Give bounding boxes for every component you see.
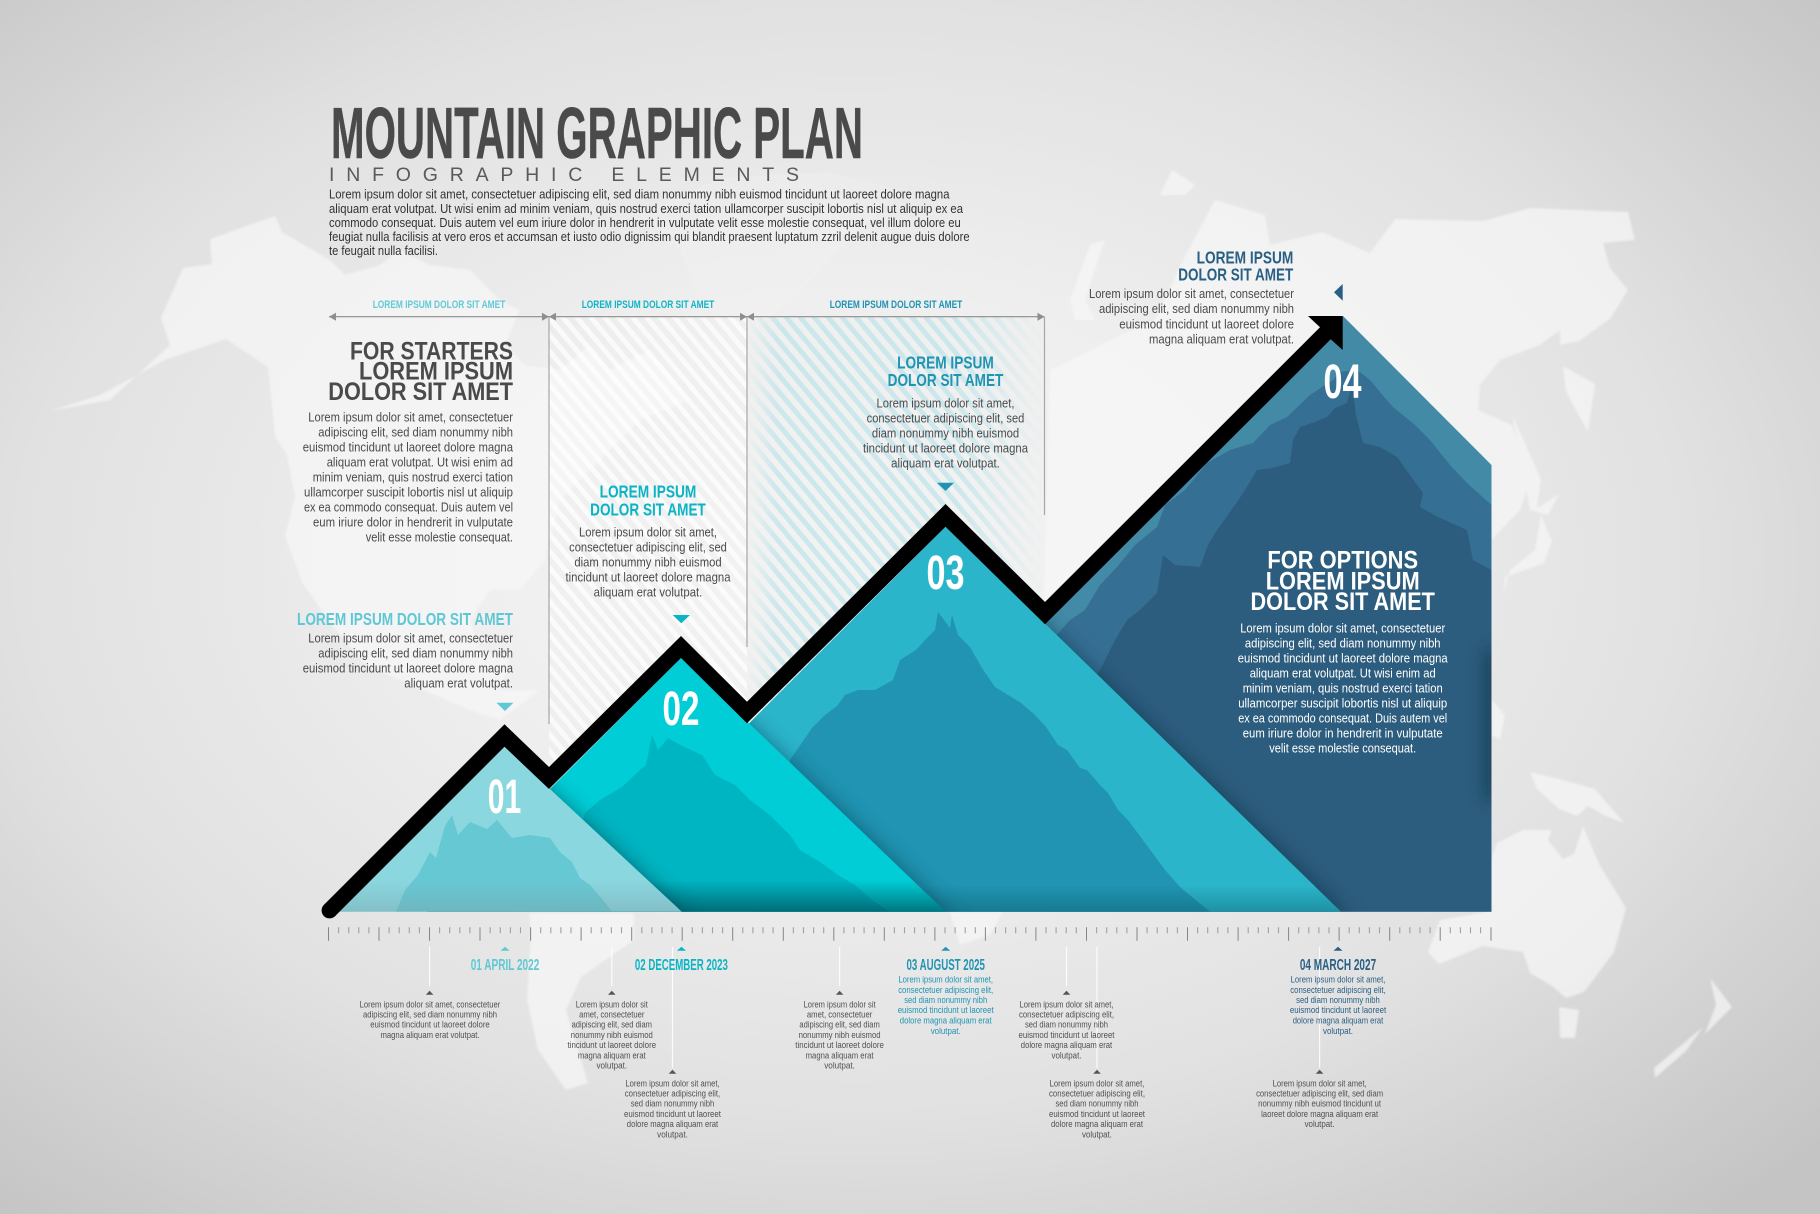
timeline note B: Lorem ipsum dolor sit: [576, 1000, 648, 1010]
subtitle: INFOGRAPHIC ELEMENTS: [329, 164, 799, 186]
timeline note D: nonummy nibh euismod: [799, 1030, 881, 1040]
timeline note C: euismod tincidunt ut laoreet: [624, 1109, 721, 1119]
timeline note D: Lorem ipsum dolor sit: [804, 1000, 876, 1010]
timeline note B: volutpat.: [596, 1060, 627, 1070]
body: for options: Lorem ipsum dolor sit amet, consectetuer: [1240, 622, 1446, 636]
callout 03: diam nonummy nibh euismod: [872, 426, 1019, 440]
body: for starters: ullamcorper suscipit lobortis nisl ut aliquip: [304, 486, 513, 500]
date 04: volutpat.: [1323, 1026, 1353, 1036]
date 03: 03 AUGUST 2025: [906, 957, 985, 974]
world map: [50, 170, 1732, 1090]
body: for options: adipiscing elit, sed diam nonummy nibh: [1245, 637, 1441, 651]
heading: for options: FOR OPTIONS: [1267, 547, 1418, 574]
callout 04: DOLOR SIT AMET: [1178, 264, 1294, 284]
timeline note F: dolore magna aliquam erat: [1051, 1119, 1143, 1129]
timeline note C: [624, 1070, 721, 1139]
callout 03: DOLOR SIT AMET: [888, 370, 1004, 390]
callout 01: LOREM IPSUM DOLOR SIT AMET: [297, 609, 513, 629]
number 03: 03: [926, 547, 964, 600]
date 01: [471, 947, 539, 974]
timeline note F: consectetuer adipiscing elit,: [1049, 1088, 1145, 1098]
heading: for options: LOREM IPSUM: [1266, 568, 1420, 595]
striped panel 2: [549, 317, 747, 787]
date 04: sed diam nonummy nibh: [1296, 995, 1380, 1005]
intro paragraph: feugiat nulla facilisis at vero eros et accumsan et iusto odio dignissim qui blandit praesent luptatum zzril delenit augue duis dolore: [329, 230, 970, 244]
timeline note E: [1018, 991, 1115, 1060]
callout 03: LOREM IPSUM: [897, 352, 994, 372]
callout 03: Lorem ipsum dolor sit amet,: [876, 396, 1014, 410]
timeline note C: consectetuer adipiscing elit,: [625, 1088, 720, 1098]
timeline note A: adipiscing elit, sed diam nonummy nibh: [363, 1010, 497, 1020]
span label 1: LOREM IPSUM DOLOR SIT AMET: [373, 299, 506, 311]
mountain 2: [427, 658, 946, 912]
date 03: Lorem ipsum dolor sit amet,: [898, 974, 993, 984]
body: for options: euismod tincidunt ut laoreet dolore magna: [1238, 652, 1449, 666]
heading: for starters: LOREM IPSUM: [359, 359, 513, 386]
mountain 1: [340, 747, 682, 912]
callout 01: aliquam erat volutpat.: [404, 677, 513, 691]
timeline note B: magna aliquam erat: [578, 1050, 646, 1060]
timeline note A: magna aliquam erat volutpat.: [380, 1030, 480, 1040]
date 03: consectetuer adipiscing elit,: [898, 985, 993, 995]
timeline note F: [1049, 1070, 1145, 1139]
callout 02: LOREM IPSUM: [600, 481, 696, 501]
heading: for starters: FOR STARTERS: [350, 338, 513, 365]
timeline note A: [360, 991, 500, 1040]
timeline note G: volutpat.: [1305, 1119, 1335, 1129]
timeline note D: amet, consectetuer: [807, 1010, 872, 1020]
heading: for starters: DOLOR SIT AMET: [328, 379, 513, 406]
date 01: 01 APRIL 2022: [471, 957, 539, 974]
callout 02: DOLOR SIT AMET: [590, 499, 706, 519]
date 04: dolore magna aliquam erat: [1293, 1016, 1384, 1026]
timeline note F: volutpat.: [1082, 1129, 1112, 1139]
striped panel 3: [747, 317, 1045, 717]
timeline note E: Lorem ipsum dolor sit amet,: [1020, 1000, 1114, 1010]
body: for starters: ex ea commodo consequat. Duis autem vel: [304, 501, 513, 515]
callout 02: [566, 481, 731, 623]
date 04: euismod tincidunt ut laoreet: [1290, 1005, 1387, 1015]
title: MOUNTAIN GRAPHIC PLAN: [331, 93, 863, 174]
timeline note D: [795, 991, 884, 1070]
callout 04: euismod tincidunt ut laoreet dolore: [1119, 318, 1294, 332]
mountain 4: [757, 316, 1492, 912]
callout 04: LOREM IPSUM: [1197, 247, 1293, 267]
timeline ruler: [328, 927, 1491, 941]
date 03: sed diam nonummy nibh: [904, 995, 987, 1005]
timeline note C: sed diam nonummy nibh: [631, 1098, 714, 1108]
timeline note B: [568, 991, 656, 1070]
callout 01: euismod tincidunt ut laoreet dolore magna: [303, 662, 514, 676]
body: for options: minim veniam, quis nostrud exerci tation: [1243, 682, 1443, 696]
timeline note G: Lorem ipsum dolor sit amet,: [1273, 1078, 1367, 1088]
date 02: 02 DECEMBER 2023: [635, 957, 728, 974]
callout 04: magna aliquam erat volutpat.: [1149, 332, 1294, 346]
timeline note E: consectetuer adipiscing elit,: [1019, 1010, 1114, 1020]
timeline note E: volutpat.: [1052, 1050, 1082, 1060]
callout 04: adipiscing elit, sed diam nonummy nibh: [1099, 302, 1294, 316]
callout 04: [1089, 247, 1343, 346]
date 04: consectetuer adipiscing elit,: [1290, 985, 1386, 995]
span dimension lines: [329, 313, 1045, 724]
number 01: 01: [488, 771, 521, 824]
date 03: volutpat.: [931, 1026, 961, 1036]
timeline note C: dolore magna aliquam erat: [627, 1119, 719, 1129]
body: for starters: aliquam erat volutpat. Ut wisi enim ad: [327, 456, 513, 470]
callout 01: adipiscing elit, sed diam nonummy nibh: [318, 647, 513, 661]
intro paragraph: commodo consequat. Duis autem vel eum iriure dolor in hendrerit in vulputate velit esse molestie consequat, vel illum dolore eu: [329, 216, 961, 230]
intro paragraph: te feugait nulla facilisi.: [329, 244, 438, 258]
intro paragraph: aliquam erat volutpat. Ut wisi enim ad minim veniam, quis nostrud exerci tation ullamcorper suscipit lobortis nisl ut aliquip ex ea: [329, 202, 964, 216]
timeline note D: adipiscing elit, sed diam: [799, 1020, 880, 1030]
intro paragraph: [329, 188, 970, 258]
heading: for options: [1251, 547, 1435, 616]
body: for options: aliquam erat volutpat. Ut wisi enim ad: [1250, 667, 1436, 681]
timeline note D: tincidunt ut laoreet dolore: [795, 1040, 884, 1050]
body: for options: ex ea commodo consequat. Duis autem vel: [1238, 712, 1447, 726]
timeline note D: volutpat.: [824, 1060, 855, 1070]
timeline note B: adipiscing elit, sed diam: [572, 1020, 652, 1030]
heading: for starters: [328, 338, 513, 406]
callout 02: tincidunt ut laoreet dolore magna: [566, 571, 731, 585]
timeline note G: laoreet dolore magna aliquam erat: [1261, 1109, 1379, 1119]
timeline note F: sed diam nonummy nibh: [1056, 1098, 1138, 1108]
callout 03: [863, 352, 1029, 491]
callout 04: Lorem ipsum dolor sit amet, consectetuer: [1089, 287, 1295, 301]
body: for starters: [303, 411, 514, 545]
intro paragraph: Lorem ipsum dolor sit amet, consectetuer adipiscing elit, sed diam nonummy nibh euismod tincidunt ut laoreet dolore magna: [329, 188, 950, 202]
timeline note G: consectetuer adipiscing elit, sed diam: [1256, 1088, 1383, 1098]
body: for options: [1238, 622, 1449, 756]
callout 03: consectetuer adipiscing elit, sed: [867, 411, 1024, 425]
body: for starters: adipiscing elit, sed diam nonummy nibh: [318, 426, 513, 440]
heading: for options: DOLOR SIT AMET: [1251, 589, 1435, 616]
panel: for starters: [303, 338, 514, 545]
timeline note C: volutpat.: [657, 1129, 688, 1139]
timeline note B: amet, consectetuer: [579, 1010, 644, 1020]
span label 3: LOREM IPSUM DOLOR SIT AMET: [830, 299, 963, 311]
body: for starters: euismod tincidunt ut laoreet dolore magna: [303, 441, 514, 455]
timeline note G: nonummy nibh euismod tincidunt ut: [1258, 1098, 1382, 1108]
body: for starters: eum iriure dolor in hendrerit in vulputate: [313, 516, 513, 530]
body: for options: velit esse molestie consequat.: [1269, 742, 1416, 756]
timeline note F: euismod tincidunt ut laoreet: [1049, 1109, 1145, 1119]
date 04: 04 MARCH 2027: [1300, 957, 1376, 974]
body: for starters: Lorem ipsum dolor sit amet, consectetuer: [308, 411, 514, 425]
callout 02: aliquam erat volutpat.: [594, 586, 702, 600]
timeline note A: Lorem ipsum dolor sit amet, consectetuer: [360, 1000, 500, 1010]
timeline note D: magna aliquam erat: [806, 1050, 874, 1060]
callout 03: tincidunt ut laoreet dolore magna: [863, 441, 1029, 455]
panel: for options: [1238, 547, 1449, 756]
callout 01: Lorem ipsum dolor sit amet, consectetuer: [308, 632, 514, 646]
number 04: 04: [1324, 356, 1362, 409]
timeline note E: sed diam nonummy nibh: [1025, 1020, 1108, 1030]
timeline note B: nonummy nibh euismod: [571, 1030, 653, 1040]
number 02: 02: [662, 683, 700, 736]
body: for starters: minim veniam, quis nostrud exerci tation: [313, 471, 513, 485]
date 03: euismod tincidunt ut laoreet: [898, 1005, 994, 1015]
timeline connector lines: [430, 947, 1320, 1068]
date 02: [635, 947, 728, 974]
body: for options: ullamcorper suscipit lobortis nisl ut aliquip: [1238, 697, 1447, 711]
timeline note F: Lorem ipsum dolor sit amet,: [1050, 1078, 1144, 1088]
date 03: dolore magna aliquam erat: [900, 1016, 992, 1026]
callout 03: aliquam erat volutpat.: [891, 456, 1000, 470]
callout 02: Lorem ipsum dolor sit amet,: [579, 526, 717, 540]
timeline note C: Lorem ipsum dolor sit amet,: [625, 1078, 720, 1088]
date 04: Lorem ipsum dolor sit amet,: [1291, 974, 1385, 984]
span label 2: LOREM IPSUM DOLOR SIT AMET: [582, 299, 715, 311]
timeline note B: tincidunt ut laoreet dolore: [568, 1040, 656, 1050]
timeline note G: [1256, 1070, 1383, 1129]
date 03: [898, 947, 994, 1036]
timeline note E: dolore magna aliquam erat: [1021, 1040, 1113, 1050]
timeline note A: euismod tincidunt ut laoreet dolore: [370, 1020, 490, 1030]
date 04: [1290, 947, 1387, 1036]
body: for starters: velit esse molestie consequat.: [366, 531, 513, 545]
body: for options: eum iriure dolor in hendrerit in vulputate: [1243, 727, 1443, 741]
callout 01: [297, 609, 514, 711]
timeline note E: euismod tincidunt ut laoreet: [1018, 1030, 1115, 1040]
mountain 3: [612, 527, 1341, 912]
black rising arrow line: [322, 316, 1343, 918]
callout 02: consectetuer adipiscing elit, sed: [569, 541, 727, 555]
callout 02: diam nonummy nibh euismod: [574, 556, 722, 570]
